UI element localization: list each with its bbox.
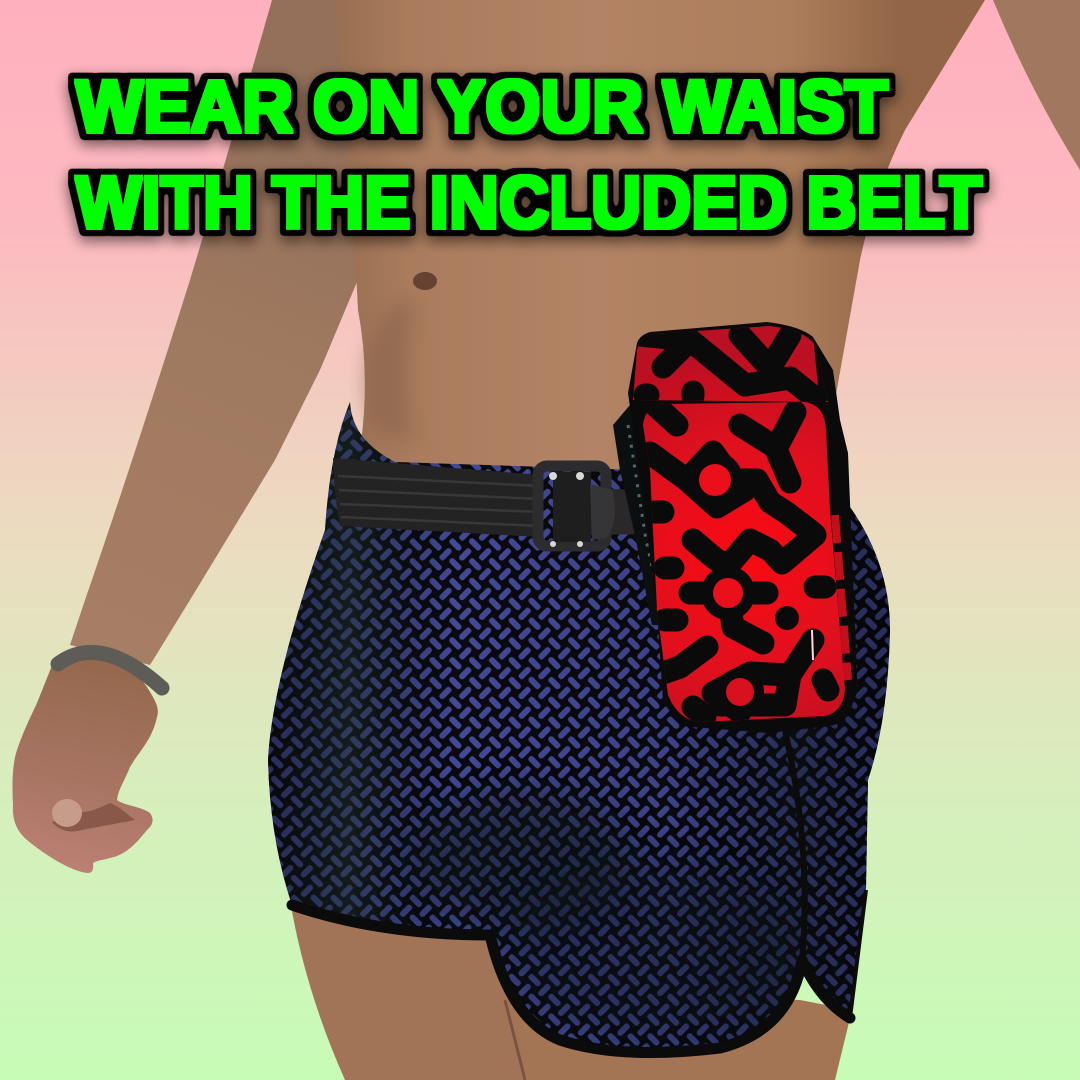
figure: torso <box>335 0 985 500</box>
title line 1: WEAR ON YOUR WAIST <box>76 65 888 148</box>
buckle <box>538 466 615 547</box>
belt with buckle <box>333 458 640 547</box>
side stripes <box>835 515 848 680</box>
front compartment <box>640 400 850 725</box>
figure: right arm <box>993 0 1080 170</box>
hand <box>12 654 158 873</box>
figure: legs <box>290 900 852 1080</box>
zipper side <box>613 405 668 625</box>
pouch body outline <box>628 322 857 733</box>
back compartment <box>633 326 828 402</box>
figure: left arm and hand <box>12 0 362 873</box>
shorts <box>260 400 900 1070</box>
title line 2: WITH THE INCLUDED BELT <box>76 161 982 244</box>
shorts hem outline <box>292 905 850 1052</box>
icon: bracelet <box>58 652 162 688</box>
title <box>76 65 982 244</box>
phone pouch <box>613 320 857 733</box>
